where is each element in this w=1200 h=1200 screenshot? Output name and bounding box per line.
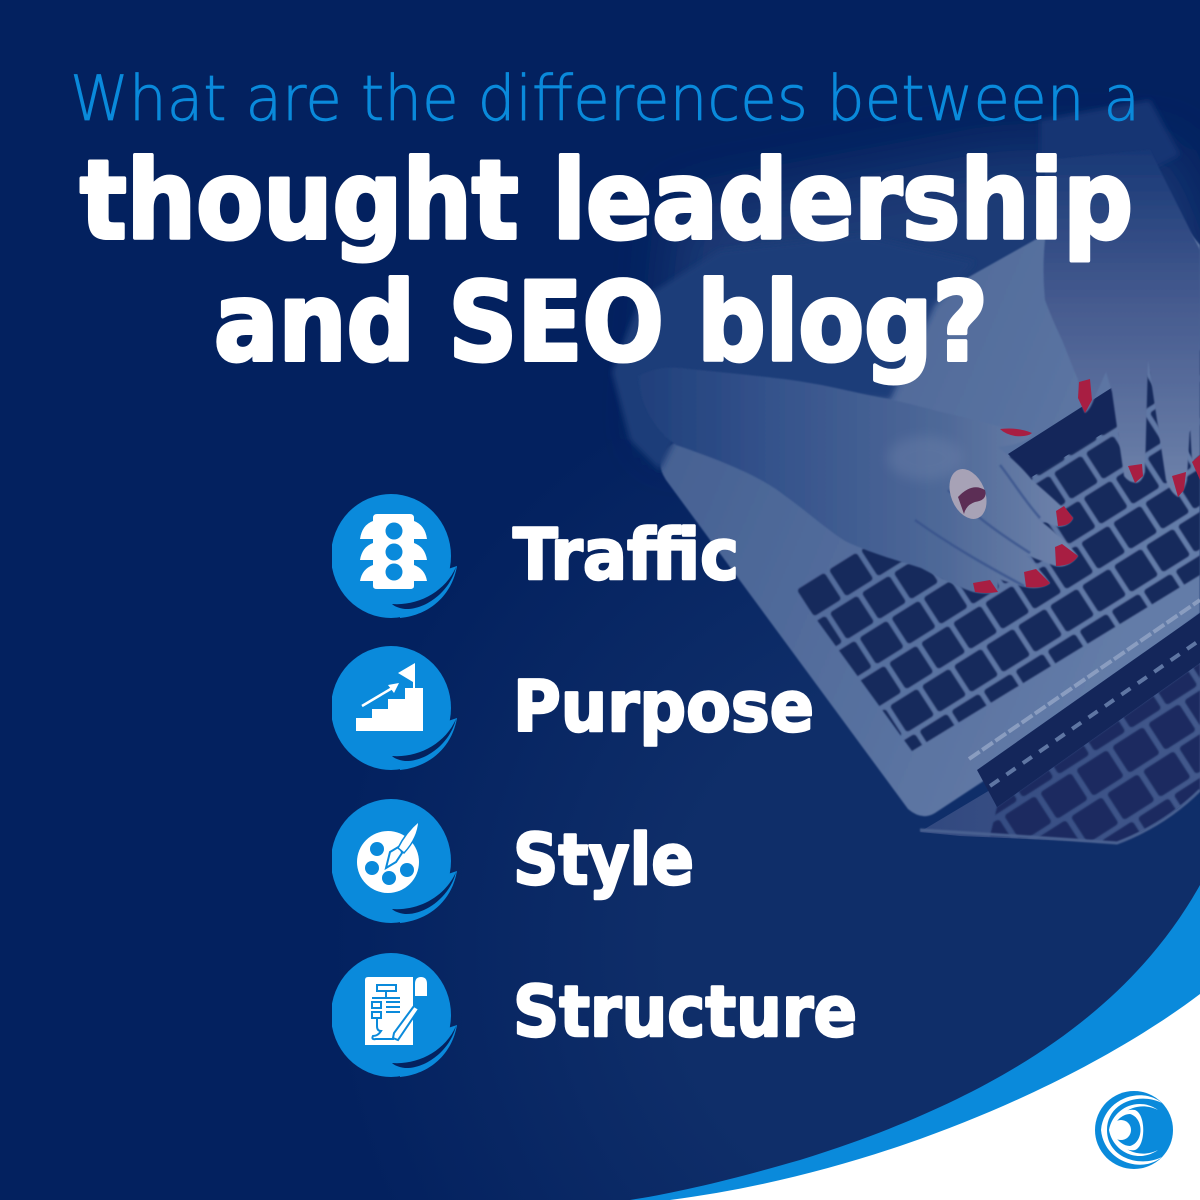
label: style: Style bbox=[513, 819, 694, 901]
corner curves bbox=[630, 885, 1200, 1200]
icon: document with flowchart bbox=[331, 953, 457, 1077]
left hand bbox=[638, 368, 1078, 594]
keyboard keys bbox=[793, 350, 1200, 751]
hand highlight bbox=[887, 436, 963, 480]
ring bbox=[942, 464, 994, 524]
list item: style bbox=[331, 799, 694, 923]
finger shading bbox=[915, 465, 1040, 586]
logo bbox=[1095, 1091, 1173, 1169]
label: purpose: Purpose bbox=[513, 666, 814, 748]
list item: purpose bbox=[331, 646, 814, 770]
icon: paint palette bbox=[331, 799, 457, 923]
hinge and screen reflection bbox=[920, 600, 1200, 843]
icon: traffic light bbox=[331, 494, 457, 618]
left hand nails bbox=[973, 428, 1078, 593]
list item: traffic bbox=[331, 494, 739, 618]
label: structure: Structure bbox=[513, 971, 857, 1053]
title line 3: and SEO blog? bbox=[214, 259, 988, 386]
blouse sleeve over laptop bbox=[612, 235, 975, 470]
right hand bbox=[1044, 150, 1200, 497]
list item: structure bbox=[331, 953, 857, 1077]
label: traffic: Traffic bbox=[513, 514, 739, 596]
title line 1: What are the differences between a bbox=[70, 62, 1140, 135]
space bar bbox=[1008, 385, 1138, 478]
icon: stairs with flag bbox=[331, 646, 457, 770]
blouse glow bbox=[660, 150, 1200, 440]
right hand nails bbox=[1078, 379, 1200, 497]
laptop body bbox=[660, 180, 1200, 816]
